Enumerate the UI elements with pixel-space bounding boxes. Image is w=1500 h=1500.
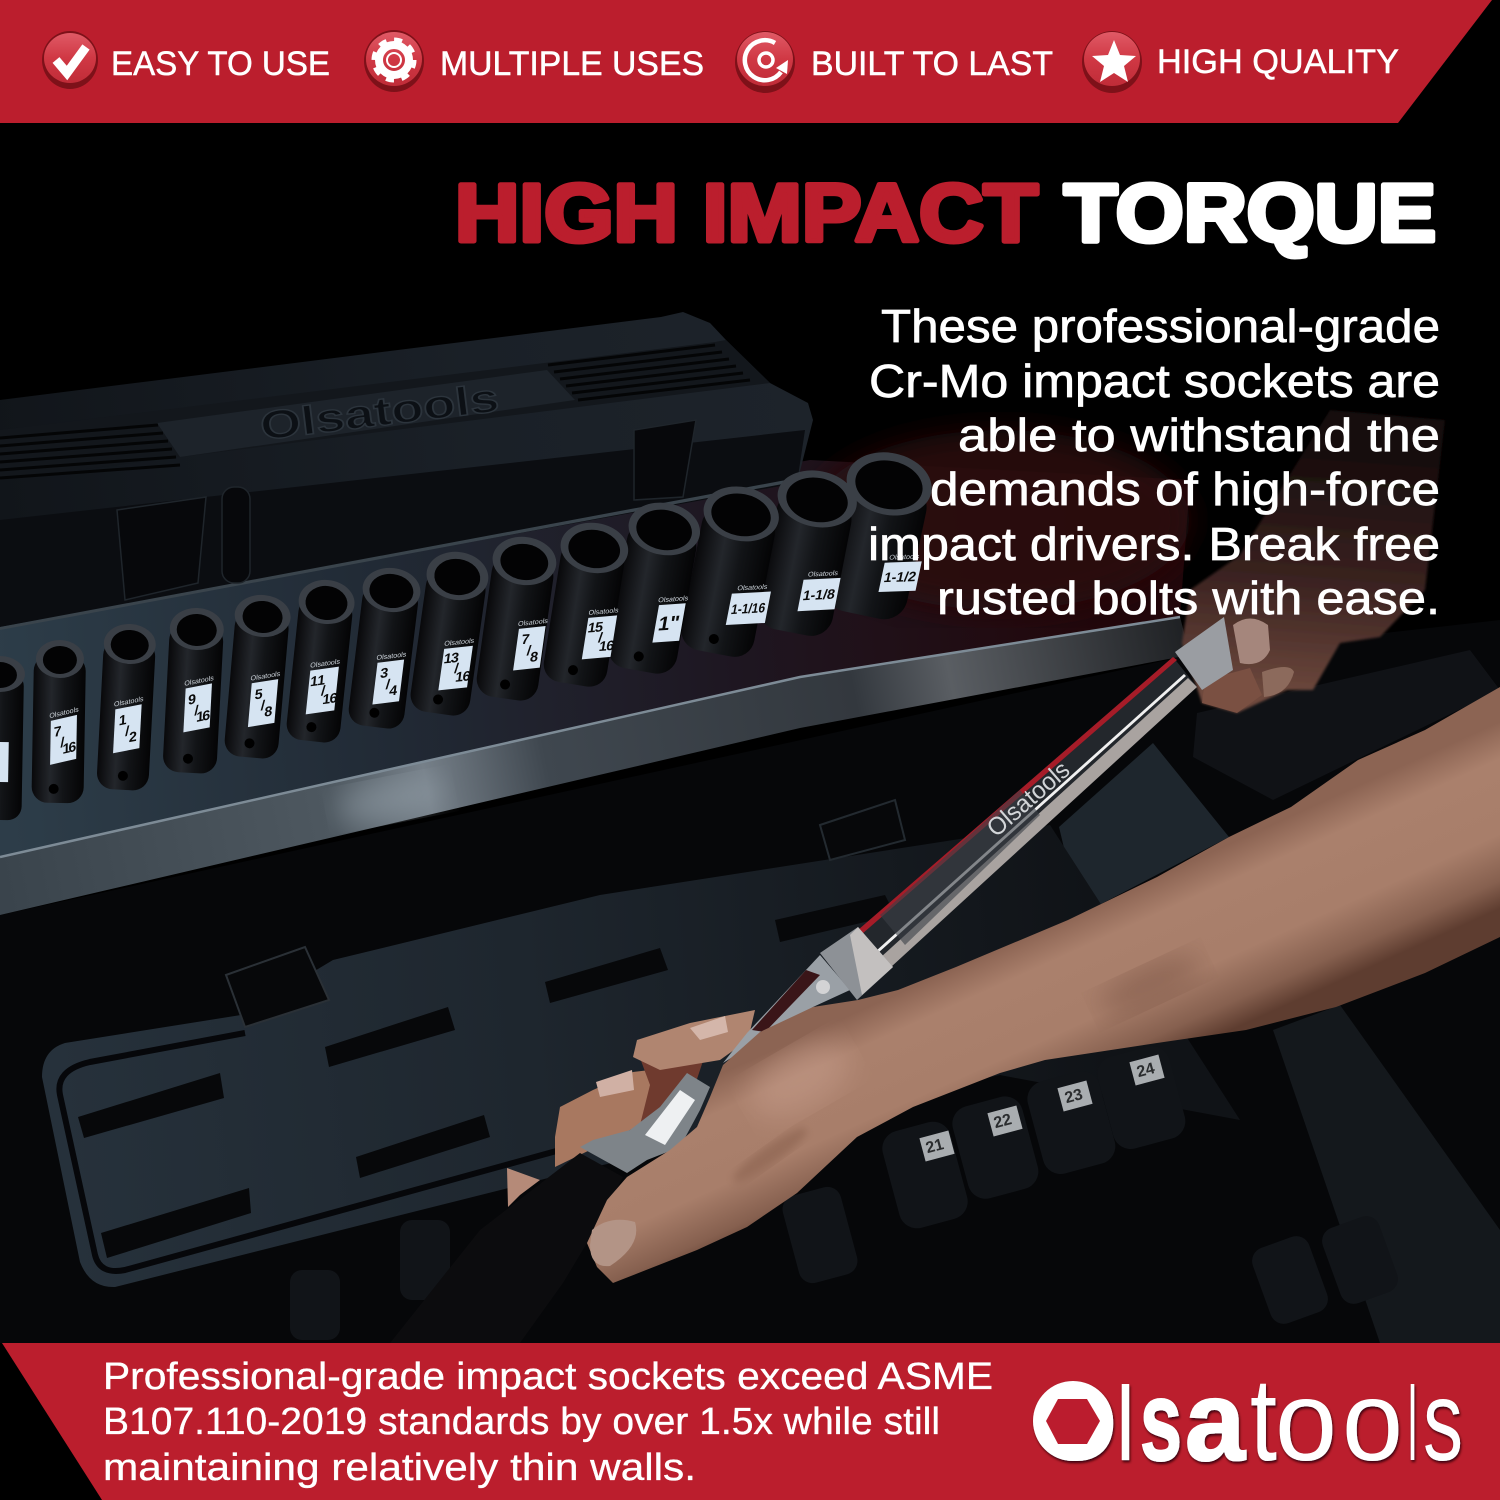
socket 7/8: 7/8	[518, 631, 542, 667]
socket 15/16: Olsatools	[588, 606, 620, 617]
text block: description: able to withstand the	[958, 409, 1440, 461]
icon: refresh arrow	[735, 31, 795, 93]
socket 3/8	[0, 656, 25, 820]
socket 1 inch: 1"	[656, 613, 681, 635]
socket 1/2: Olsatools	[114, 695, 144, 709]
stored sockets with numbers: 21	[924, 1136, 946, 1157]
socket 1-1/16: 1-1/16	[730, 601, 767, 618]
socket 9/16	[162, 607, 225, 774]
logo: Olsatools: O	[1036, 1366, 1118, 1483]
socket 1/2: 1/2	[117, 710, 138, 748]
wrench brand text: Olsatools	[982, 756, 1075, 843]
socket 11/16: Olsatools	[310, 658, 341, 670]
stored sockets with numbers	[290, 1042, 1402, 1340]
socket 11/16: 11/16	[307, 671, 340, 710]
label: multiple uses: MULTIPLE USES	[440, 45, 704, 83]
socket 1-1/16	[677, 480, 790, 662]
title	[455, 168, 1436, 259]
label: high quality: HIGH QUALITY	[1157, 43, 1399, 81]
socket 1-1/8: 1-1/8	[801, 587, 836, 604]
tray slots	[78, 800, 905, 1258]
photo: black carrying case	[0, 312, 813, 630]
tray plate	[42, 825, 1240, 1287]
socket 3/4	[346, 565, 423, 730]
icon: gear	[364, 30, 424, 92]
icon: check mark	[42, 31, 98, 89]
socket 15/16	[539, 518, 633, 690]
socket 7/8: Olsatools	[517, 617, 549, 628]
logo: Olsatools: a	[1185, 1358, 1246, 1484]
stored sockets with numbers: 23	[1063, 1086, 1085, 1107]
socket 7/16	[31, 640, 86, 803]
socket 1 inch	[604, 497, 704, 677]
socket 5/8: 5/8	[252, 685, 275, 722]
stored sockets with numbers: 22	[992, 1111, 1014, 1132]
text block: description: impact drivers. Break free	[868, 518, 1440, 570]
socket 1-1/16: Olsatools	[737, 583, 769, 592]
case logo: Olsatools	[258, 376, 501, 449]
socket 13/16: Olsatools	[444, 637, 475, 648]
panel: bottom red banner	[2, 1343, 1500, 1500]
socket 5/8: Olsatools	[250, 670, 281, 683]
socket 1-1/8: Olsatools	[807, 569, 839, 579]
socket 7/16: Olsatools	[49, 705, 79, 720]
text block: description	[868, 300, 1440, 624]
socket 7/8	[473, 533, 559, 703]
text block: description: These professional-grade	[881, 300, 1440, 352]
stored sockets with numbers: 24	[1135, 1060, 1157, 1081]
socket 5/8	[222, 593, 292, 760]
logo: Olsatools	[1033, 1354, 1463, 1486]
case clasps	[117, 420, 696, 600]
socket 9/16: 9/16	[187, 689, 212, 728]
logo: Olsatools: o	[1342, 1358, 1403, 1484]
logo: Olsatools: s	[1140, 1358, 1182, 1484]
title: HIGH IMPACT	[455, 168, 1038, 259]
panel: top red banner	[0, 0, 1492, 123]
photo: lower storage tray	[0, 620, 1500, 1343]
logo: Olsatools: t	[1250, 1354, 1277, 1486]
socket 1-1/2: Olsatools	[888, 553, 921, 562]
socket 11/16	[284, 577, 357, 744]
text block: standards note: maintaining relatively thin walls.	[103, 1447, 696, 1489]
logo: Olsatools: o	[1275, 1358, 1337, 1484]
socket 3/4: 3/4	[377, 664, 401, 701]
photo: forearm and hand	[587, 687, 1500, 1283]
socket 1-1/2	[819, 445, 943, 625]
socket 7/16: 7/16	[53, 720, 77, 760]
label: built to last: BUILT TO LAST	[811, 45, 1053, 83]
text block: description: Cr-Mo impact sockets are	[869, 355, 1440, 407]
photo: torque wrench shaft	[816, 617, 1233, 1000]
socket 15/16: 15/16	[583, 618, 619, 656]
socket 1 inch: Olsatools	[658, 594, 689, 604]
photo: row of impact sockets	[0, 445, 943, 820]
socket 1/2	[96, 623, 157, 791]
socket 13/16	[407, 548, 491, 718]
text block: description: demands of high-force	[930, 463, 1440, 515]
case ridges	[0, 345, 750, 478]
socket 9/16: Olsatools	[184, 674, 214, 688]
logo: Olsatools: s	[1423, 1358, 1463, 1484]
photo: fingers, chrome head and rubber grip	[390, 955, 850, 1343]
photo: metal shelf	[0, 430, 1190, 915]
logo: Olsatools: l	[1118, 1366, 1133, 1483]
socket 3/4: Olsatools	[376, 650, 407, 662]
text block: description: rusted bolts with ease.	[937, 572, 1440, 624]
text block: standards note: Professional-grade impact sockets exceed ASME	[103, 1356, 993, 1398]
label: easy to use: EASY TO USE	[111, 45, 330, 83]
socket 13/16: 13/16	[440, 649, 474, 687]
socket 1-1/2: 1-1/2	[882, 569, 918, 586]
text block: standards note	[103, 1356, 993, 1489]
photo: upper hand gripping wrench	[1182, 410, 1445, 713]
logo: Olsatools: l	[1408, 1366, 1417, 1483]
title: TORQUE	[1064, 168, 1436, 259]
socket 1-1/8	[752, 464, 862, 640]
text block: standards note: B107.110-2019 standards by over 1.5x while still	[103, 1401, 940, 1443]
icon: star	[1082, 31, 1142, 93]
